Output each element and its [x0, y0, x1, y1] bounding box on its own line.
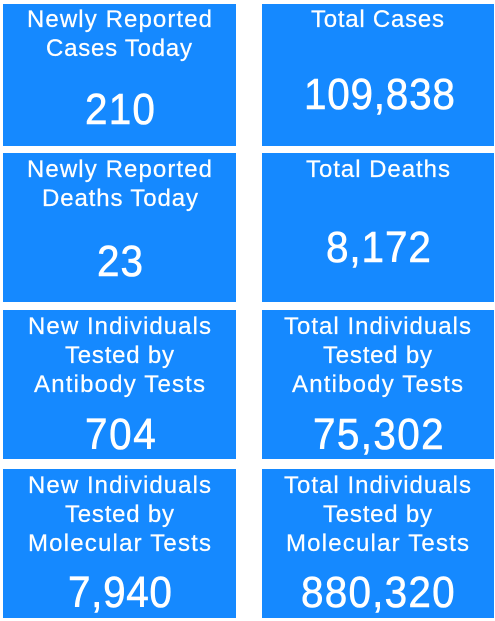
panel: newly reported cases today: 210 [85, 84, 155, 133]
panel: new individuals tested by antibody tests: Tested by [65, 342, 174, 369]
panel: total individuals tested by antibody tests: Total Individuals [284, 313, 471, 340]
panel: total individuals tested by antibody tests: Tested by [323, 342, 432, 369]
panel: newly reported cases today: Newly Reported [27, 6, 212, 33]
panel: total cases: Total Cases [311, 6, 444, 33]
panel: new individuals tested by antibody tests: 704 [85, 409, 156, 458]
panel: total individuals tested by molecular tests [262, 469, 494, 618]
panel: new individuals tested by molecular tests: New Individuals [28, 472, 211, 499]
panel: total deaths [262, 153, 494, 302]
panel: new individuals tested by molecular tests: 7,940 [68, 567, 172, 616]
panel: total cases: 109,838 [304, 69, 455, 118]
panel: total individuals tested by antibody tests: Antibody Tests [292, 371, 463, 398]
panel: newly reported cases today [3, 4, 236, 146]
panel: total individuals tested by antibody tests [262, 310, 494, 459]
panel: newly reported deaths today: Deaths Today [42, 185, 198, 212]
panel: total deaths: Total Deaths [306, 156, 450, 183]
panel: new individuals tested by antibody tests: Antibody Tests [34, 371, 205, 398]
panel: new individuals tested by antibody tests [3, 310, 236, 459]
panel: newly reported deaths today [3, 153, 236, 302]
panel: total cases [262, 4, 494, 146]
panel: total individuals tested by antibody tests: 75,302 [313, 409, 444, 458]
panel: total individuals tested by molecular tests: Molecular Tests [286, 530, 469, 557]
panel: total individuals tested by molecular tests: Total Individuals [284, 472, 471, 499]
panel: new individuals tested by molecular tests [3, 469, 236, 618]
panel: newly reported deaths today: Newly Reported [27, 156, 212, 183]
panel: newly reported deaths today: 23 [97, 236, 143, 285]
panel: total deaths: 8,172 [326, 222, 431, 271]
panel: total individuals tested by molecular tests: 880,320 [301, 567, 455, 616]
panel: new individuals tested by molecular tests: Molecular Tests [28, 530, 211, 557]
panel: total individuals tested by molecular tests: Tested by [323, 501, 432, 528]
panel: newly reported cases today: Cases Today [46, 35, 192, 62]
panel: new individuals tested by antibody tests: New Individuals [28, 313, 211, 340]
panel: new individuals tested by molecular tests: Tested by [65, 501, 174, 528]
